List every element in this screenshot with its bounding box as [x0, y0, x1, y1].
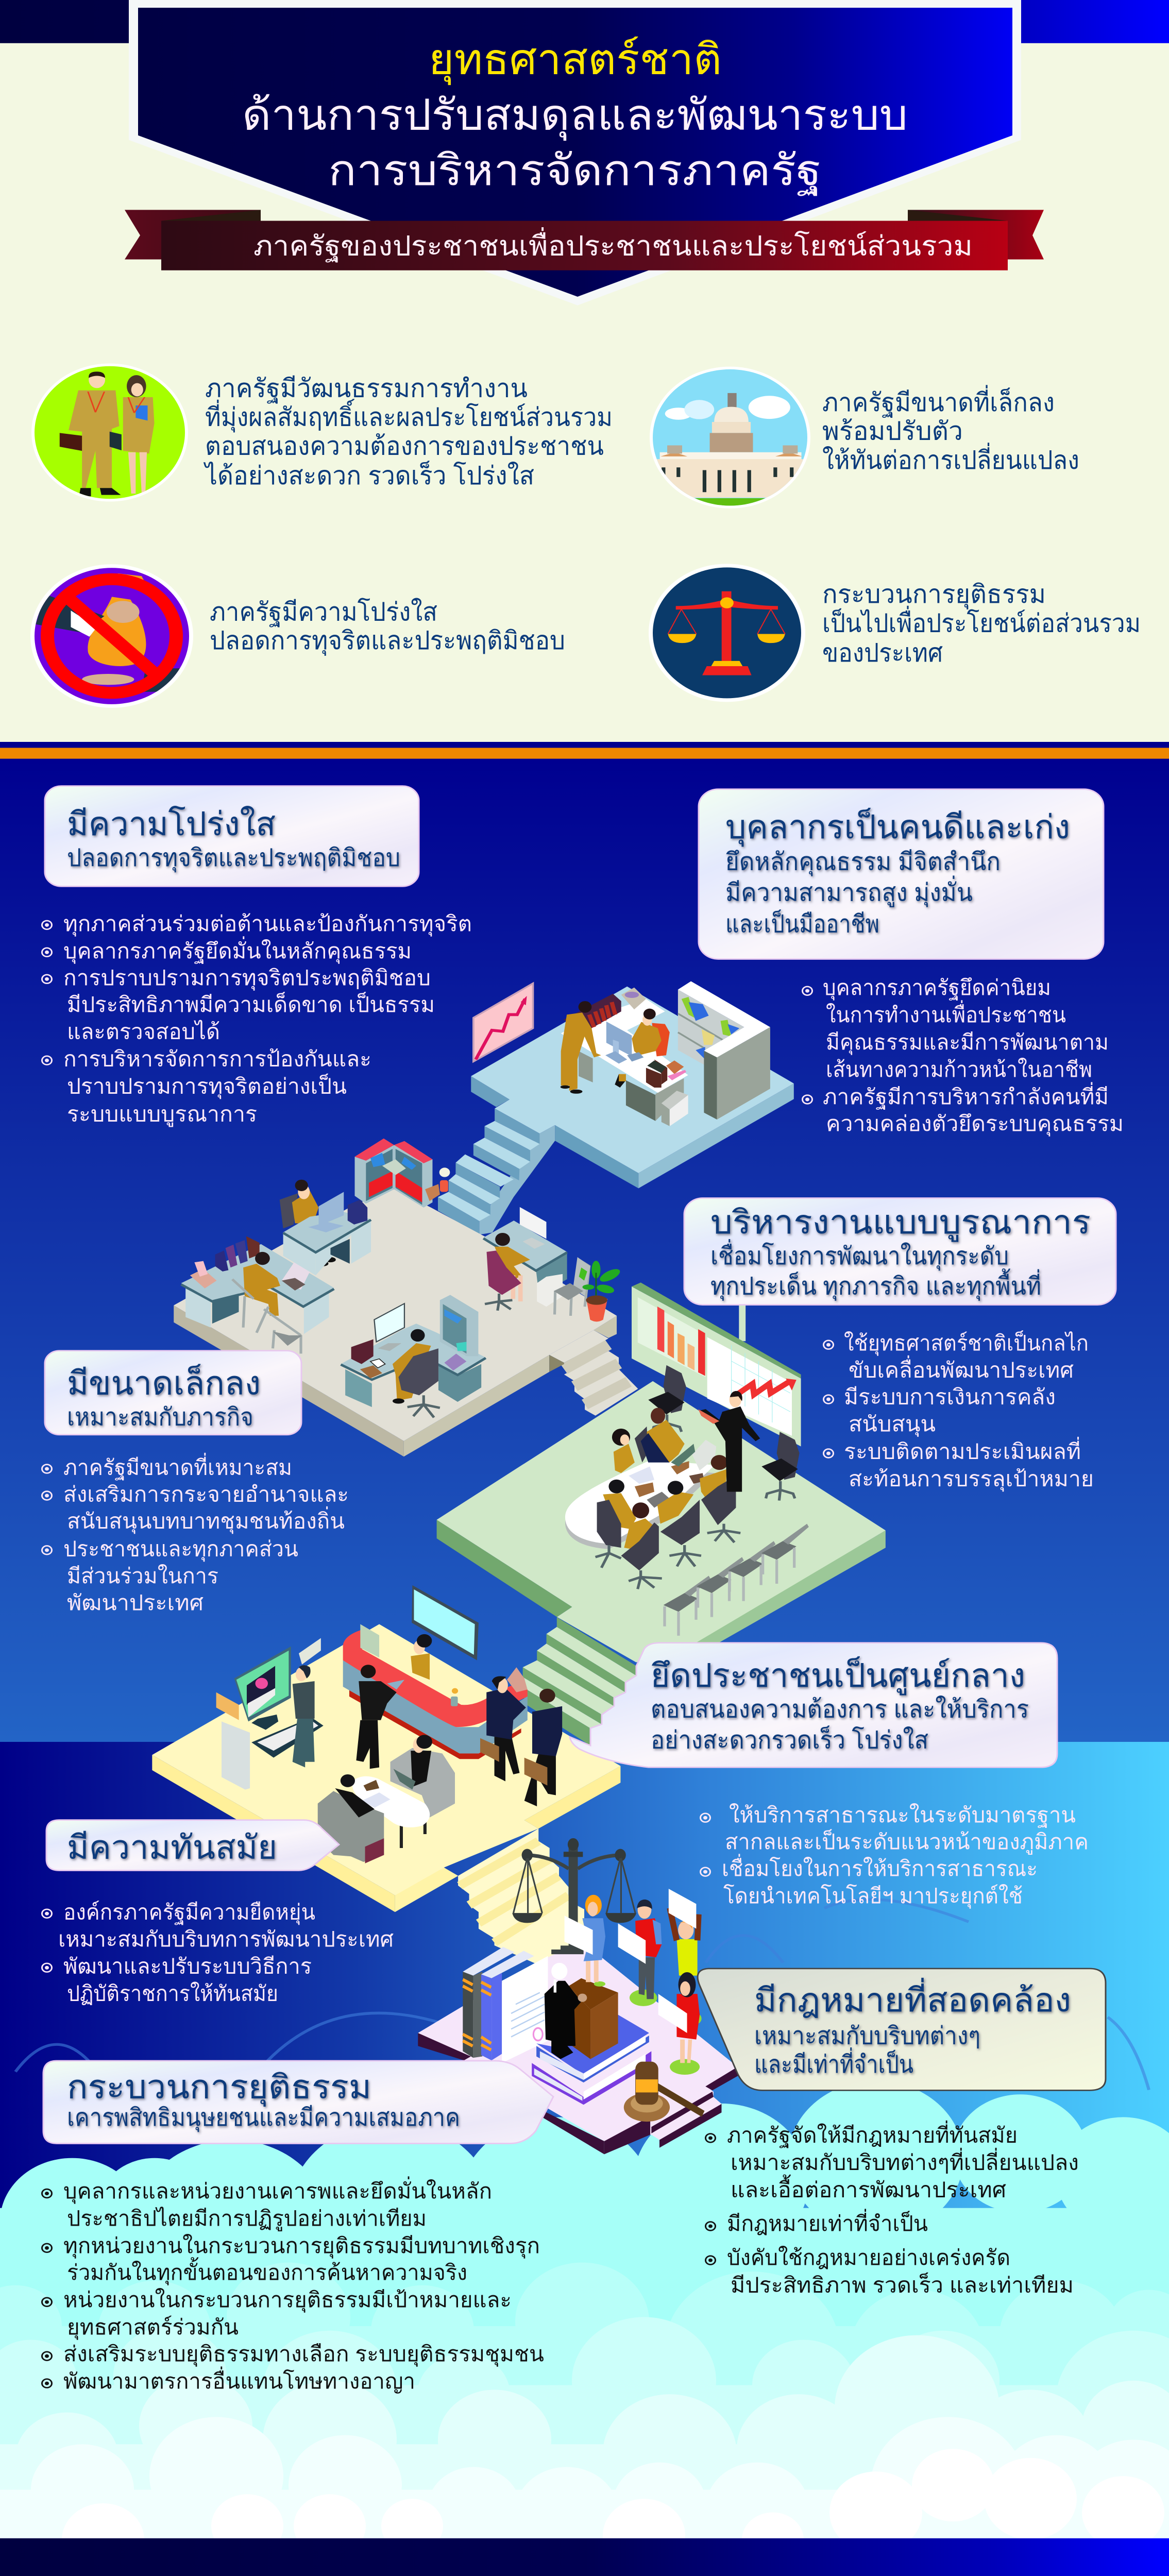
bullets: integrated management: สนับสนุน: [849, 1412, 936, 1437]
box: good and capable personnel: และเป็นมืออาชีพ: [725, 910, 879, 938]
box: citizen centred: ตอบสนองความต้องการ และให้บริการ: [651, 1695, 1029, 1723]
bullets: modern: พัฒนาและปรับระบบวิธีการ: [63, 1955, 312, 1978]
ribbon: ภาครัฐของประชาชนเพื่อประชาชนและประโยชน์ส่วนรวม: [253, 227, 973, 262]
info text 4: [822, 580, 1141, 667]
box: citizen centred: อย่างสะดวกรวดเร็ว โปร่งใส: [651, 1725, 928, 1754]
row of spare chairs: [664, 1524, 809, 1636]
box: justice process: [43, 2061, 553, 2143]
bullets: justice process: [42, 2176, 544, 2393]
bullets: appropriate laws: ภาครัฐจัดให้มีกฎหมายที่ทันสมัย: [727, 2121, 1018, 2148]
box: integrated management: บริหารงานแบบบูรณาการ: [710, 1205, 1091, 1242]
info text 3: ปลอดการทุจริตและประพฤติมิชอบ: [210, 626, 565, 656]
platform: [471, 987, 794, 1189]
box: transparency: ปลอดการทุจริตและประพฤติมิชอบ: [67, 844, 400, 872]
bullets: appropriate laws: มีกฎหมายเท่าที่จำเป็น: [727, 2209, 928, 2235]
box: citizen centred: [570, 1643, 1057, 1767]
title: ด้านการปรับสมดุลและพัฒนาระบบ: [242, 91, 908, 141]
bullets: transparency: ระบบแบบบูรณาการ: [67, 1103, 257, 1127]
presentation board: [632, 1282, 801, 1447]
bullets: integrated management: ระบบติดตามประเมินผลที่: [844, 1437, 1081, 1464]
bullets: modern: เหมาะสมกับบริบทการพัฒนาประเทศ: [58, 1927, 394, 1951]
bullets: smaller size: พัฒนาประเทศ: [67, 1591, 204, 1615]
bullets: integrated management: [823, 1330, 1094, 1492]
bullets: justice process: หน่วยงานในกระบวนการยุติธรรมมีเป้าหมายและ: [63, 2288, 512, 2313]
bullets: citizen centred: ให้บริการสาธารณะในระดับมาตรฐาน: [729, 1803, 1076, 1828]
box: smaller size: [45, 1351, 301, 1435]
info text 3: [210, 598, 565, 656]
bullets: modern: องค์กรภาครัฐมีความยืดหยุ่น: [63, 1901, 315, 1925]
bullets: transparency: และตรวจสอบได้: [67, 1020, 220, 1044]
info text 3: ภาครัฐมีความโปร่งใส: [210, 598, 437, 628]
box: integrated management: ทุกประเด็น ทุกภารกิจ และทุกพื้นที่: [710, 1268, 1041, 1301]
bullets: appropriate laws: [706, 2121, 1079, 2297]
illustration: executive office: [438, 981, 794, 1234]
header shield: [129, 0, 1021, 306]
bullets: appropriate laws: และเอื้อต่อการพัฒนาประเทศ: [731, 2175, 1006, 2202]
kiosk: [216, 1638, 324, 1790]
box: appropriate laws: มีกฎหมายที่สอดคล้อง: [754, 1977, 1071, 2019]
bullets: appropriate laws: บังคับใช้กฎหมายอย่างเคร่งครัด: [727, 2246, 1010, 2269]
box: appropriate laws: และมีเท่าที่จำเป็น: [754, 2047, 913, 2078]
reception counter: [343, 1624, 528, 1759]
bullets: personnel: บุคลากรภาครัฐยึดค่านิยม: [823, 976, 1051, 1001]
bullets: personnel: [803, 976, 1124, 1137]
info text 4: ของประเทศ: [822, 639, 943, 667]
info text 1: ภาครัฐมีวัฒนธรรมการทำงาน: [205, 375, 528, 404]
upper stairs: [523, 1617, 636, 1745]
bullets: citizen centred: เชื่อมโยงในการให้บริการสาธารณะ: [722, 1854, 1038, 1880]
wall chart: [473, 984, 533, 1061]
bullets: appropriate laws: เหมาะสมกับบริบทต่างๆที่เปลี่ยนแปลง: [731, 2148, 1079, 2175]
bullets: modern: [42, 1901, 394, 2006]
box: smaller size: มีขนาดเล็กลง: [67, 1364, 261, 1401]
icon: no corruption: [30, 564, 193, 708]
bottom bar: [0, 2538, 1169, 2576]
bullets: modern: ปฏิบัติราชการให้ทันสมัย: [67, 1981, 278, 2006]
bullets: transparency: มีประสิทธิภาพมีความเด็ดขาด เป็นธรรม: [67, 992, 435, 1016]
info text 1: ตอบสนองความต้องการของประชาชน: [205, 432, 604, 461]
info text 1: [203, 375, 613, 490]
bullets: integrated management: ขับเคลื่อนพัฒนาประเทศ: [849, 1355, 1074, 1382]
bullets: transparency: การปราบปรามการทุจริตประพฤติมิชอบ: [63, 966, 431, 991]
stripe band: [0, 742, 1169, 759]
box: justice process: เคารพสิทธิมนุษยชนและมีความเสมอภาค: [67, 2104, 460, 2132]
bullets: personnel: ความคล่องตัวยึดระบบคุณธรรม: [826, 1112, 1124, 1137]
bullets: transparency: [42, 912, 472, 1127]
visitor at kiosk: [293, 1665, 315, 1767]
info text 2: พร้อมปรับตัว: [822, 417, 963, 446]
box: transparency: [45, 786, 419, 886]
bullets: smaller size: มีส่วนร่วมในการ: [67, 1564, 218, 1588]
box: good and capable personnel: บุคลากรเป็นคนดีและเก่ง: [725, 808, 1070, 847]
bullets: smaller size: สนับสนุนบทบาทชุมชนท้องถิ่น: [67, 1506, 345, 1534]
bullets: transparency: ปราบปรามการทุจริตอย่างเป็น: [67, 1073, 347, 1099]
title: ยุทธศาสตร์ชาติ: [429, 36, 722, 85]
binders and books: [646, 1059, 686, 1088]
bullets: transparency: การบริหารจัดการการป้องกันและ: [63, 1047, 371, 1071]
bullets: integrated management: สะท้อนการบรรลุเป้าหมาย: [849, 1467, 1094, 1492]
bullets: justice process: พัฒนามาตรการอื่นแทนโทษทางอาญา: [63, 2366, 415, 2393]
illustration: open-plan office: [174, 1139, 638, 1456]
box: good and capable personnel: ยึดหลักคุณธรรม มีจิตสำนึก: [725, 848, 1001, 876]
clouds: [0, 2081, 1169, 2576]
desk centre with officer: [341, 1295, 486, 1417]
bullets: citizen centred: สากลและเป็นระดับแนวหน้าของภูมิภาค: [725, 1829, 1089, 1855]
info text 2: [822, 385, 1079, 474]
bullets: smaller size: ประชาชนและทุกภาคส่วน: [63, 1537, 298, 1562]
info text 2: ภาครัฐมีขนาดที่เล็กลง: [822, 385, 1055, 418]
bullets: citizen centred: [701, 1803, 1089, 1909]
box: transparency: มีความโปร่งใส: [67, 805, 276, 842]
illustration: law books, judge and citizens: [463, 1889, 703, 2122]
bullets: justice process: ยุทธศาสตร์ร่วมกัน: [67, 2315, 239, 2340]
box: modern: มีความทันสมัย: [67, 1829, 277, 1866]
seated officer with monitor: [605, 1009, 670, 1088]
info text 2: ให้ทันต่อการเปลี่ยนแปลง: [822, 443, 1079, 474]
bullets: personnel: ภาครัฐมีการบริหารกำลังคนที่มี: [823, 1082, 1109, 1110]
top bars: [0, 0, 1169, 43]
box: appropriate laws: [698, 1969, 1106, 2090]
icon: parliament building: [649, 367, 812, 509]
illustration: scales statue: [512, 1838, 636, 1954]
box: integrated management: [684, 1198, 1116, 1305]
ribbon: [125, 210, 1044, 270]
info text 4: กระบวนการยุติธรรม: [822, 580, 1046, 609]
bullets: smaller size: ภาครัฐมีขนาดที่เหมาะสม: [63, 1452, 292, 1481]
box: good and capable personnel: [699, 789, 1104, 959]
lower blue background: [0, 742, 1169, 2541]
corner bookcase: [355, 1139, 450, 1208]
illustration: law floor: [418, 1939, 740, 2154]
bullets: integrated management: ใช้ยุทธศาสตร์ชาติเป็นกลไก: [844, 1330, 1089, 1356]
box: good and capable personnel: มีความสามารถสูง มุ่งมั่น: [725, 876, 973, 908]
bullets: personnel: ในการทำงานเพื่อประชาชน: [826, 1000, 1066, 1027]
platform: [437, 1381, 886, 1663]
title: [242, 36, 908, 196]
bullets: justice process: ทุกหน่วยงานในกระบวนการยุติธรรมมีบทบาทเชิงรุก: [63, 2234, 540, 2259]
standing officer: [561, 1001, 601, 1094]
bullets: appropriate laws: มีประสิทธิภาพ รวดเร็ว และเท่าเทียม: [731, 2272, 1074, 2297]
meeting table: [565, 1440, 716, 1549]
presenter: [698, 1391, 760, 1492]
box: citizen centred: ยึดประชาชนเป็นศูนย์กลาง: [651, 1656, 1025, 1696]
box: justice process: กระบวนการยุติธรรม: [67, 2069, 371, 2107]
bullets: transparency: ทุกภาคส่วนร่วมต่อต้านและป้องกันการทุจริต: [63, 912, 472, 937]
bullets: transparency: บุคลากรภาครัฐยึดมั่นในหลักคุณธรรม: [63, 936, 412, 964]
client at counter: [356, 1665, 404, 1769]
floor: [174, 1189, 638, 1456]
bullets: citizen centred: โดยนำเทคโนโลยีฯ มาประยุกต์ใช้: [723, 1884, 1023, 1909]
icon: civil servants: [31, 363, 188, 502]
page background cream: [0, 0, 1169, 745]
info text 1: ได้อย่างสะดวก รวดเร็ว โปร่งใส: [203, 460, 534, 490]
bullets: integrated management: มีระบบการเงินการคลัง: [844, 1385, 1056, 1409]
bullets: justice process: ร่วมกันในทุกขั้นตอนของการค้นหาความจริง: [67, 2257, 467, 2285]
businessmen: [480, 1676, 562, 1806]
seated attendees and chairs: [596, 1365, 800, 1589]
icon: scales of justice: [649, 564, 805, 702]
box: integrated management: เชื่อมโยงการพัฒนาในทุกระดับ: [710, 1240, 1009, 1270]
box: smaller size: เหมาะสมกับภารกิจ: [67, 1403, 253, 1431]
bullets: smaller size: [42, 1452, 349, 1615]
staircase: [438, 1109, 555, 1234]
sofas and coffee table: [318, 1735, 455, 1863]
bullets: personnel: มีคุณธรรมและมีการพัฒนาตาม: [826, 1031, 1109, 1055]
title: การบริหารจัดการภาครัฐ: [328, 146, 822, 196]
bullets: justice process: ประชาธิปไตยมีการปฏิรูปอย่างเท่าเทียม: [67, 2207, 427, 2231]
illustration: yellow lobby floor and stairs: [152, 1624, 620, 1963]
box: appropriate laws: เหมาะสมกับบริบทต่างๆ: [754, 2022, 980, 2049]
illustration: meeting room: [437, 1282, 886, 1663]
bullets: justice process: ส่งเสริมระบบยุติธรรมทางเลือก ระบบยุติธรรมชุมชน: [63, 2342, 544, 2367]
illustration: lobby service: [216, 1585, 636, 1863]
desk right with seated woman: [483, 1207, 622, 1321]
bullets: smaller size: ส่งเสริมการกระจายอำนาจและ: [63, 1483, 349, 1506]
desk with laptop and seated officer: [181, 1236, 334, 1353]
box: modern: [46, 1820, 339, 1871]
cabinet: [678, 981, 770, 1120]
desk: [561, 988, 688, 1126]
desk with monitor top: [280, 1180, 371, 1275]
tv: [412, 1585, 479, 1660]
info text 1: ที่มุ่งผลสัมฤทธิ์และผลประโยชน์ส่วนรวม: [205, 399, 613, 432]
bullets: justice process: บุคลากรและหน่วยงานเคารพและยึดมั่นในหลัก: [63, 2176, 492, 2204]
bullets: personnel: เส้นทางความก้าวหน้าในอาชีพ: [826, 1058, 1092, 1081]
